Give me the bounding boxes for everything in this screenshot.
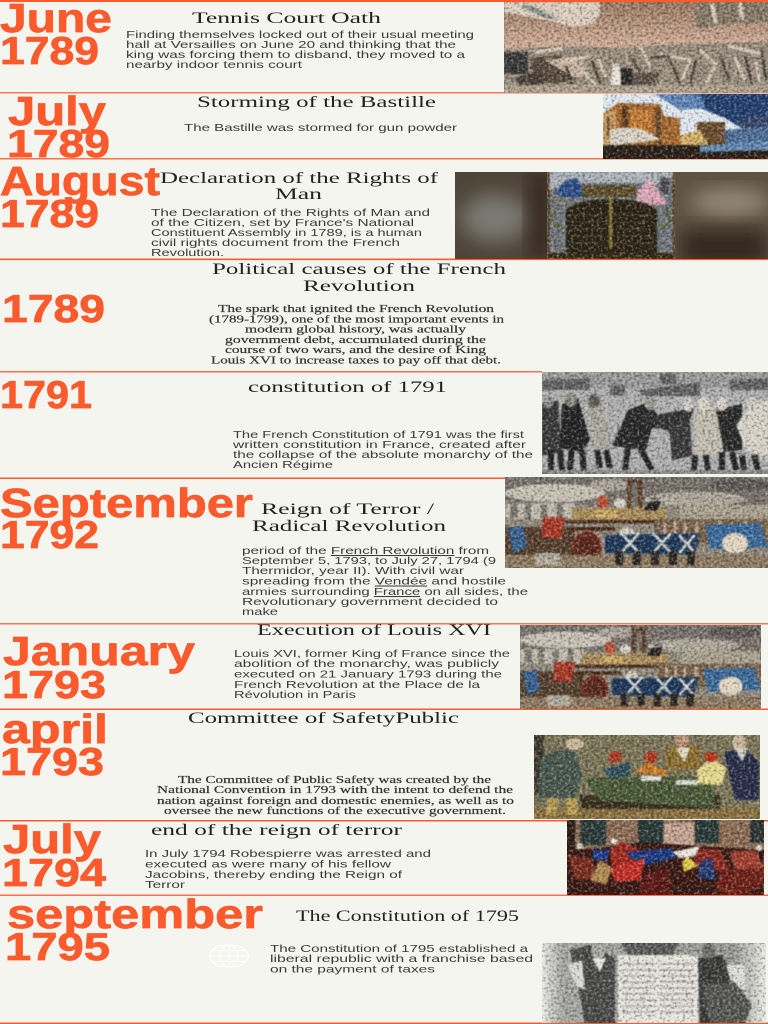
text block: constitution of 1791 description: written constitution in France, created after xyxy=(232,440,527,451)
date: september 1795: 1795 xyxy=(5,926,110,969)
heading: Declaration of the Rights of Man: Man xyxy=(275,186,322,203)
text block: Political causes description: government debt, accumulated during the xyxy=(225,335,486,346)
heading: Declaration of the Rights of Man: Declaration of the Rights of xyxy=(160,170,439,187)
text block: Constitution of 1795 description: liberal republic with a franchise based xyxy=(270,954,533,965)
heading: Political causes of the French Revolution xyxy=(212,261,506,295)
text block: Declaration description: Constituent Assembly in 1789, is a human xyxy=(151,228,422,239)
date: July 1794: 1794 xyxy=(2,852,106,895)
text block: end of terror description: Terror xyxy=(145,880,186,891)
date: april 1793: 1793 xyxy=(0,741,104,784)
text block: Political causes description: modern global history, was actually xyxy=(245,324,467,336)
text block: Declaration description xyxy=(151,208,430,259)
date: January 1793 xyxy=(2,628,195,707)
date: July 1789: 1789 xyxy=(7,123,110,166)
image: arrest of Robespierre painting xyxy=(565,818,766,897)
text block: constitution of 1791 description xyxy=(232,430,533,471)
text block: Declaration description: of the Citizen, set by France's National xyxy=(151,218,414,229)
heading: Execution of Louis XVI: Execution of Louis XVI xyxy=(257,622,491,639)
date: September 1792 xyxy=(0,480,253,557)
text block: Committee description: The Committee of Public Safety was created by the xyxy=(178,775,491,786)
text block: Execution description: Révolution in Paris xyxy=(234,690,356,701)
text block: Political causes description: course of two wars, and the desire of King xyxy=(225,345,487,356)
text block: Tennis Court Oath description: hall at Versailles on June 20 and thinking that the xyxy=(126,40,456,51)
text block: Declaration description: The Declaration of the Rights of Man and xyxy=(151,208,430,219)
date: August 1789 xyxy=(0,158,160,236)
text block: Political causes description: (1789-1799), one of the most important events in xyxy=(209,314,505,326)
text block: Declaration description: Revolution. xyxy=(151,248,224,259)
heading: The Constitution of 1795: The Constitution of 1795 xyxy=(296,908,519,925)
panel: July 1789 Storming of the Bastille xyxy=(8,94,768,159)
date: June 1789: 1789 xyxy=(0,30,99,73)
text block: Committee description: oversee the new functions of the executive government. xyxy=(164,806,506,817)
text block: Reign of Terror description xyxy=(242,546,528,618)
icon: globe xyxy=(210,945,248,967)
heading: end of the reign of terror: end of the reign of terror xyxy=(151,822,403,839)
heading: Declaration of the Rights of Man xyxy=(160,170,439,203)
text block: Reign of Terror description: spreading from the Vendée and hostile xyxy=(242,576,506,588)
heading: Reign of Terror / Radical Revolution: Reign of Terror / xyxy=(261,501,435,518)
image: Storming of the Bastille painting xyxy=(600,92,768,162)
date: September 1792: 1792 xyxy=(0,514,99,557)
panel: August 1789 Declaration of the Rights of Man xyxy=(0,166,768,259)
heading: Reign of Terror / Radical Revolution xyxy=(252,501,446,535)
heading: Political causes of the French Revolution: Revolution xyxy=(303,278,415,295)
date: September 1792: September xyxy=(0,480,253,526)
heading: Storming of the Bastille: Storming of the Bastille xyxy=(197,94,436,111)
text block: Political causes description xyxy=(209,304,505,366)
heading: Committee of SafetyPublic: Committee of SafetyPublic xyxy=(188,710,459,727)
text block: Execution description: French Revolution at the Place de la xyxy=(234,680,480,691)
text block: Reign of Terror description: September 5, 1793, to July 27, 1794 (9 xyxy=(242,556,496,567)
text block: Reign of Terror description: Revolutionary government decided to xyxy=(242,597,498,608)
text block: constitution of 1791 description: The French Constitution of 1791 was the first xyxy=(233,430,524,441)
text block: Declaration description: civil rights document from the French xyxy=(151,238,400,249)
image: Committee of Public Safety painting xyxy=(532,732,762,821)
heading: Tennis Court Oath: Tennis Court Oath xyxy=(192,10,381,27)
date: July 1794: July xyxy=(3,816,101,862)
text block: Tennis Court Oath description: king was forcing them to disband, they moved to a xyxy=(126,50,465,61)
text block: Tennis Court Oath description: Finding themselves locked out of their usual meeting xyxy=(126,30,474,41)
text block: end of terror description: Jacobins, thereby ending the Reign of xyxy=(145,870,402,881)
panel: April 1793 Committee of Public Safety xyxy=(0,706,762,821)
text block: Execution description: abolition of the monarchy, was publicly xyxy=(234,659,500,670)
text block: constitution of 1791 description: Ancien Régime xyxy=(233,460,333,471)
panel: 1791 constitution of 1791 xyxy=(0,370,768,476)
text block: end of terror description xyxy=(145,849,431,891)
date: January 1793: 1793 xyxy=(2,664,106,707)
date: april 1793: april xyxy=(2,706,108,752)
heading: Political causes of the French Revolution: Political causes of the French xyxy=(212,261,506,278)
text block: Execution description: executed on 21 January 1793 during the xyxy=(234,670,502,680)
date: August 1789: August xyxy=(0,158,160,204)
text block: Bastille description: The Bastille was stormed for gun powder xyxy=(184,123,458,134)
text block: Tennis Court Oath description: nearby indoor tennis court xyxy=(126,60,302,71)
text block: Political causes description: The spark that ignited the French Revolution xyxy=(218,304,495,315)
date: april 1793 xyxy=(0,706,108,784)
panel: 1789 Political causes of the French Revolution xyxy=(2,261,506,366)
panel: September 1795 The Constitution of 1795 xyxy=(5,891,768,1024)
date: september 1795 xyxy=(5,891,263,969)
panel: June 1789 Tennis Court Oath xyxy=(0,0,768,94)
text block: Reign of Terror description: period of the French Revolution from xyxy=(242,546,489,557)
date: July 1789: July xyxy=(8,88,106,134)
date: september 1795: september xyxy=(7,891,263,937)
date: 1789: 1789 xyxy=(2,288,105,331)
text block: Constitution of 1795 description: The Constitution of 1795 established a xyxy=(270,944,528,955)
image: Constitution of 1795 engraving xyxy=(540,941,768,1024)
date: July 1789 xyxy=(7,88,110,166)
text block: constitution of 1791 description: the collapse of the absolute monarchy of the xyxy=(233,450,533,461)
text block: Reign of Terror description: armies surrounding France on all sides, the xyxy=(242,587,528,598)
text block: Committee description xyxy=(157,775,514,817)
text block: Committee description: National Convention in 1793 with the intent to defend the xyxy=(157,785,513,796)
text block: Committee description: nation against foreign and domestic enemies, as well as to xyxy=(157,796,514,807)
text block: Reign of Terror description: make xyxy=(242,607,278,618)
image: execution of Louis XVI painting xyxy=(520,625,763,709)
date: June 1789 xyxy=(0,0,112,73)
text block: Constitution of 1795 description xyxy=(270,944,533,976)
date: August 1789: 1789 xyxy=(0,193,99,236)
text block: end of terror description: executed as were many of his fellow xyxy=(145,860,392,870)
panel: July 1794 end of the reign of terror xyxy=(2,816,766,897)
image: Tennis Court Oath painting xyxy=(504,0,768,94)
date: July 1794 xyxy=(2,816,106,895)
panel: January 1793 Execution of Louis XVI xyxy=(2,622,763,709)
text block: Constitution of 1795 description: on the payment of taxes xyxy=(270,964,435,976)
date: 1791: 1791 xyxy=(0,374,92,417)
panel: September 1792 Reign of Terror xyxy=(0,477,768,618)
text block: Political causes description: Louis XVI to increase taxes to pay off that debt. xyxy=(211,356,501,366)
heading: Reign of Terror / Radical Revolution: Radical Revolution xyxy=(252,518,446,535)
image: Declaration of the Rights of Man painting xyxy=(455,172,768,264)
text block: Reign of Terror description: Thermidor, year II). With civil war xyxy=(242,566,465,577)
text block: Execution description xyxy=(234,649,510,701)
text block: Tennis Court Oath description xyxy=(126,30,474,71)
heading: constitution of 1791: constitution of 1791 xyxy=(248,379,447,396)
image: execution scene painting xyxy=(505,477,768,568)
text block: end of terror description: In July 1794 Robespierre was arrested and xyxy=(145,849,431,860)
date: January 1793: January xyxy=(3,628,195,674)
image: constitution of 1791 engraving xyxy=(540,370,768,476)
text block: Execution description: Louis XVI, former King of France since the xyxy=(234,649,510,660)
